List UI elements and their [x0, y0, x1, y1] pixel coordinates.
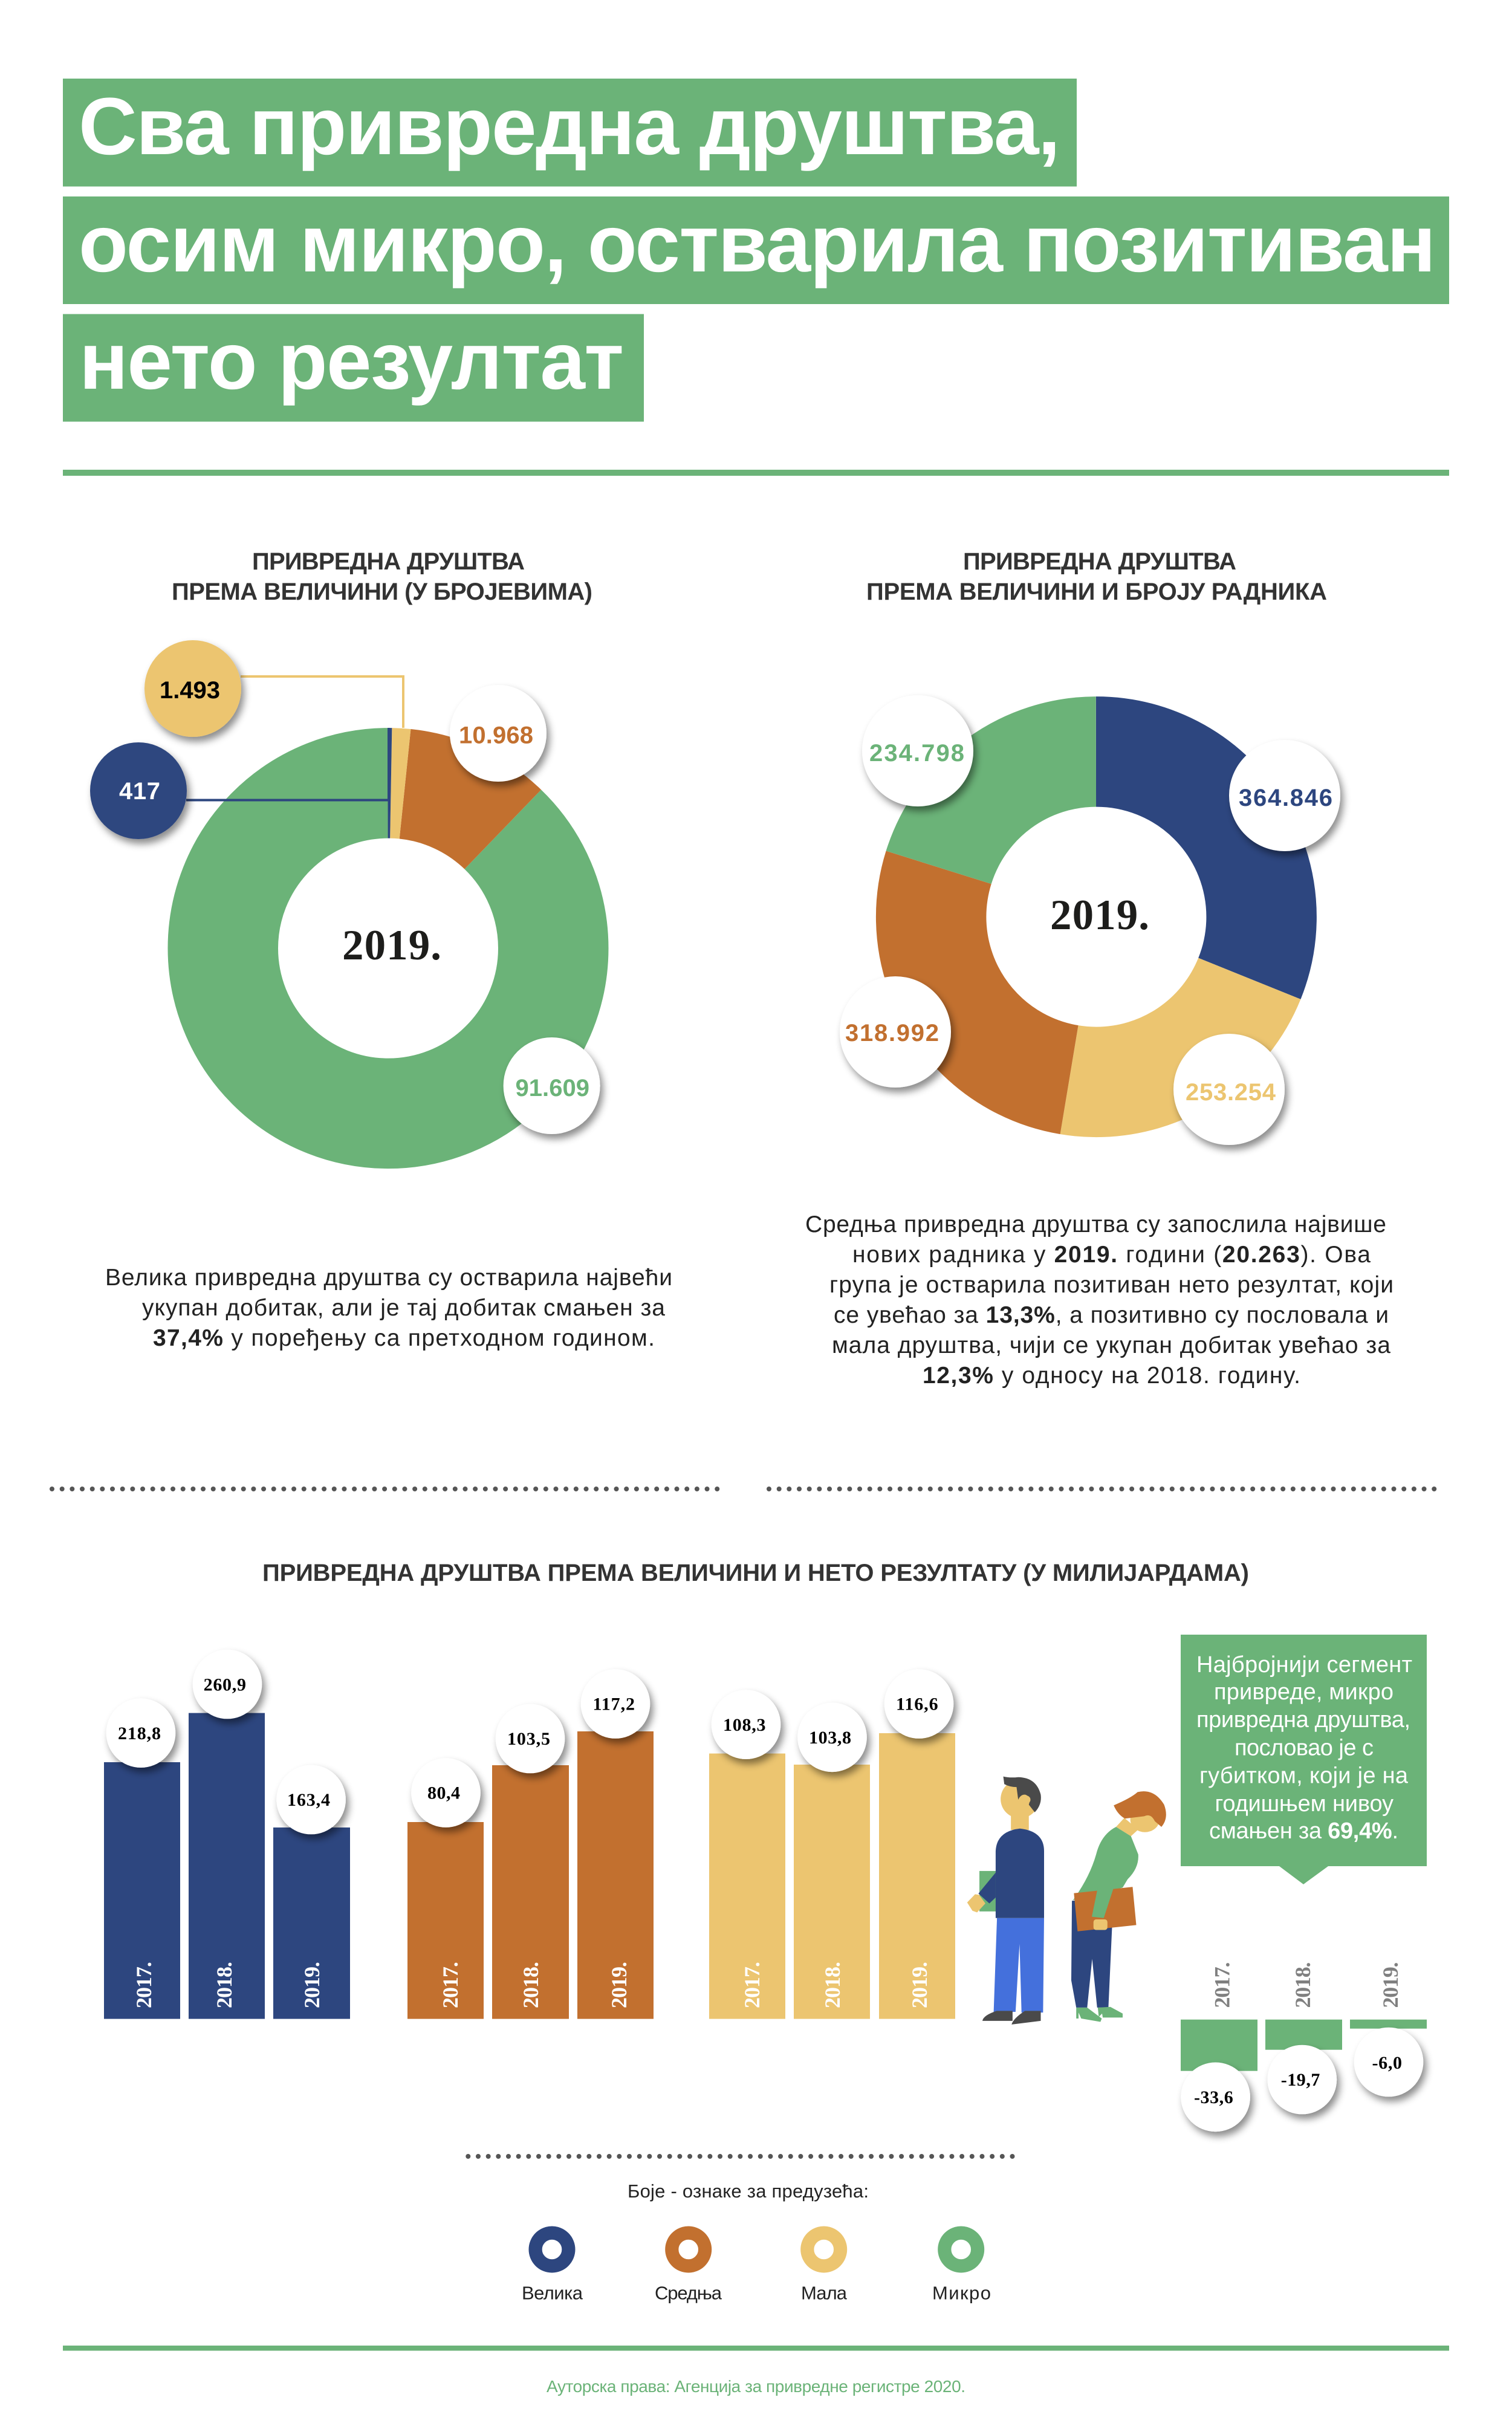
text block: medium companies: група је остварила позитиван нето резултат, који	[829, 1272, 1394, 1298]
bar chart: micro companies (negative): -19,7	[1281, 2070, 1320, 2090]
callout: 417	[90, 742, 187, 839]
heading: companies by size and workers	[866, 548, 1327, 605]
callout: micro companies: привреде, микро	[1214, 1679, 1394, 1705]
bar chart: medium companies: 80,4	[427, 1783, 460, 1803]
text block: medium companies: нових радника у 2019. години (20.263). Ова	[852, 1242, 1371, 1268]
callout: 91.609: 91.609	[515, 1075, 589, 1101]
bar chart: large companies: 218,8	[118, 1724, 161, 1743]
footer: copyright: Ауторска права: Агенција за привредне регистре 2020.	[547, 2377, 965, 2396]
title: осим микро, остварила позитиван	[79, 199, 1436, 289]
heading: companies by size and workers: ПРИВРЕДНА ДРУШТВА	[963, 548, 1236, 575]
donut chart: workers 2019	[931, 751, 1262, 1082]
callout: 318.992: 318.992	[845, 1020, 939, 1046]
legend	[522, 2181, 991, 2304]
bar chart: small companies: 2017.	[740, 1962, 764, 2008]
bar chart: medium companies: 103,5	[507, 1729, 550, 1749]
callout: 234.798: 234.798	[869, 740, 964, 767]
bar chart: medium companies	[407, 1669, 654, 2019]
bar chart: small companies: 2019.	[907, 1962, 932, 2008]
callout: micro companies	[1181, 1635, 1427, 1884]
connector: large companies	[186, 728, 389, 800]
text block: medium companies	[805, 1211, 1394, 1389]
bar chart: small companies: 2018.	[820, 1962, 845, 2008]
bar chart: large companies: 260,9	[204, 1675, 246, 1694]
bar chart: micro companies (negative): -6,0	[1372, 2053, 1402, 2073]
bar chart: small companies: 103,8	[809, 1728, 851, 1748]
illustration: woman with folder	[1071, 1791, 1166, 2022]
legend: Микро	[932, 2283, 991, 2304]
callout: micro companies: годишњем нивоу	[1215, 1791, 1394, 1817]
heading: net result: ПРИВРЕДНА ДРУШТВА ПРЕМА ВЕЛИЧИНИ И НЕТО РЕЗУЛТАТУ (У МИЛИЈАРДАМА)	[262, 1560, 1249, 1586]
bar chart: large companies: 2018.	[212, 1962, 236, 2008]
callout: 253.254: 253.254	[1186, 1079, 1276, 1106]
bar chart: small companies: 116,6	[896, 1694, 938, 1714]
text block: large companies: укупан добитак, али је тај добитак смањен за	[142, 1295, 665, 1321]
year label: 2019.	[1050, 892, 1149, 939]
callout: 318.992	[840, 976, 951, 1088]
heading: companies by size: ПРЕМА ВЕЛИЧИНИ (У БРОЈЕВИМА)	[172, 579, 592, 605]
callout: 364.846: 364.846	[1239, 785, 1332, 811]
callout: micro companies: смањен за 69,4%.	[1209, 1818, 1398, 1844]
text block: large companies	[105, 1265, 672, 1351]
callout: 10.968: 10.968	[459, 722, 533, 748]
callout: micro companies: Најбројнији сегмент	[1196, 1652, 1412, 1678]
bar chart: micro companies (negative)	[1181, 1962, 1427, 2132]
year label: 2019.	[342, 922, 441, 969]
text block: medium companies: 12,3% у односу на 2018. годину.	[923, 1363, 1300, 1389]
bar chart: micro companies (negative): 2019.	[1378, 1962, 1403, 2008]
text block: medium companies: Средња привредна друштва су запослила највише	[805, 1211, 1386, 1237]
callout: 1.493: 1.493	[160, 677, 220, 704]
bar chart: medium companies: 2017.	[438, 1962, 462, 2008]
legend: Боје - ознаке за предузећа:	[628, 2181, 869, 2202]
legend: Велика	[522, 2283, 583, 2304]
bar chart: large companies	[104, 1650, 350, 2019]
callout: 417: 417	[119, 778, 160, 805]
callout: 10.968	[450, 685, 547, 782]
bar chart: micro companies (negative): -33,6	[1194, 2087, 1233, 2107]
callout: 1.493	[144, 640, 241, 737]
title	[63, 79, 1449, 422]
callout: micro companies: привредна друштва,	[1196, 1707, 1410, 1733]
bar chart: small companies: 108,3	[723, 1715, 765, 1735]
title: Сва привредна друштва,	[79, 82, 1060, 172]
text block: medium companies: мала друштва, чији се укупан добитак увећао за	[832, 1332, 1390, 1358]
bar chart: large companies: 2019.	[300, 1962, 324, 2008]
bar chart: small companies	[709, 1669, 955, 2019]
text block: large companies: 37,4% у поређењу са претходном годином.	[153, 1325, 655, 1351]
legend: Мала	[801, 2283, 848, 2304]
callout: 234.798	[862, 695, 973, 806]
bar chart: medium companies: 2019.	[607, 1962, 631, 2008]
heading: companies by size	[172, 548, 592, 605]
bar chart: medium companies: 117,2	[592, 1694, 635, 1714]
text block: large companies: Велика привредна друштва су остварила највећи	[105, 1265, 672, 1291]
callout: 91.609	[504, 1037, 600, 1134]
illustration: man with folder	[967, 1777, 1044, 2025]
title: нето резултат	[79, 316, 624, 406]
heading: companies by size: ПРИВРЕДНА ДРУШТВА	[252, 548, 525, 575]
bar chart: large companies: 163,4	[287, 1790, 330, 1810]
bar chart: micro companies (negative): 2018.	[1291, 1962, 1315, 2008]
callout: micro companies: губитком, који је на	[1199, 1763, 1409, 1789]
donut chart: companies by size 2019	[223, 783, 553, 1114]
legend: Средња	[655, 2283, 722, 2304]
bar chart: large companies: 2017.	[132, 1962, 156, 2008]
callout: micro companies: пословао је с	[1235, 1735, 1374, 1760]
bar chart: medium companies: 2018.	[519, 1962, 543, 2008]
callout: 253.254	[1173, 1034, 1285, 1145]
text block: medium companies: се увећао за 13,3%, а позитивно су пословала и	[834, 1302, 1389, 1328]
heading: companies by size and workers: ПРЕМА ВЕЛИЧИНИ И БРОЈУ РАДНИКА	[866, 579, 1327, 605]
connector: small companies	[241, 676, 403, 728]
bar chart: micro companies (negative): 2017.	[1210, 1962, 1235, 2008]
callout: 364.846	[1229, 740, 1340, 851]
